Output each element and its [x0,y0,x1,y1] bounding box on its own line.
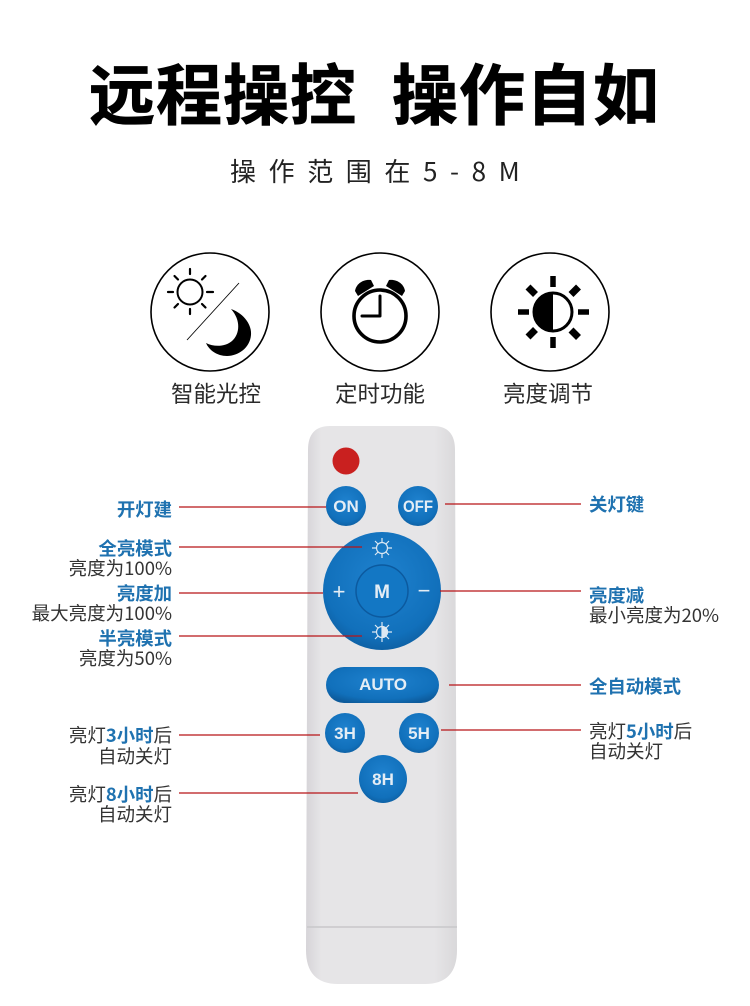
control dial: + [333,579,345,604]
control dial: M [374,582,390,603]
callout: brightness up [32,580,172,626]
title: 操作自如 [392,43,660,139]
button: ON [326,486,366,526]
leader lines [179,504,581,793]
indicator light [332,448,360,474]
label: brightness adjust: 亮度调节 [503,377,593,409]
title [89,43,660,139]
callout: half brightness: 亮度为50% [79,645,172,671]
label: timer function: 定时功能 [335,377,425,409]
callout: half brightness: 半亮模式 [98,625,172,651]
callout: brightness up: 亮度加 [117,580,172,606]
callout: on key: 开灯建 [117,496,172,522]
label: smart light control: 智能光控 [171,377,261,409]
callout: full brightness: 亮度为100% [69,555,172,581]
callout: 5 hours: 自动关灯 [589,738,663,764]
callout: 8 hours [69,781,172,827]
button: 8H: 8H [372,770,394,789]
icon: day and night [151,253,269,371]
button: 5H [399,713,439,753]
callout: brightness up: 最大亮度为100% [32,600,172,626]
button: AUTO [326,667,439,703]
remote control [306,426,457,984]
subtitle: 操作范围在5-8M [230,152,532,189]
callout: 5 hours: 亮灯5小时后 [589,718,692,744]
callout: brightness down: 亮度减 [589,582,644,608]
control dial: − [418,578,430,603]
button: 3H [325,713,365,753]
callout: auto mode: 全自动模式 [589,673,681,699]
icon: half brightness [372,622,392,642]
button: 5H: 5H [408,724,430,743]
button: OFF: OFF [403,497,433,516]
callout: 8 hours: 亮灯8小时后 [69,781,172,807]
callout: 3 hours [69,722,172,769]
callout: off key: 关灯键 [589,491,644,517]
callout: 5 hours [589,718,692,764]
button: ON: ON [333,497,359,516]
callout: full brightness [69,535,172,581]
icon: alarm clock [321,253,439,371]
button: 3H: 3H [334,724,356,743]
button: 8H [359,755,407,803]
title: 远程操控 [89,43,357,139]
control dial [323,532,441,650]
callout: full brightness: 全亮模式 [98,535,172,561]
button: AUTO: AUTO [359,675,407,694]
callout: brightness down [589,582,719,628]
icon: brightness [491,253,609,371]
callout: 3 hours: 亮灯3小时后 [69,722,172,748]
callout: brightness down: 最小亮度为20% [589,602,719,628]
callout: 3 hours: 自动关灯 [98,743,172,769]
callout: 8 hours: 自动关灯 [98,801,172,827]
button: OFF [398,486,438,526]
icon: full brightness [372,538,392,558]
remote body [306,426,457,984]
callout: half brightness [79,625,172,671]
